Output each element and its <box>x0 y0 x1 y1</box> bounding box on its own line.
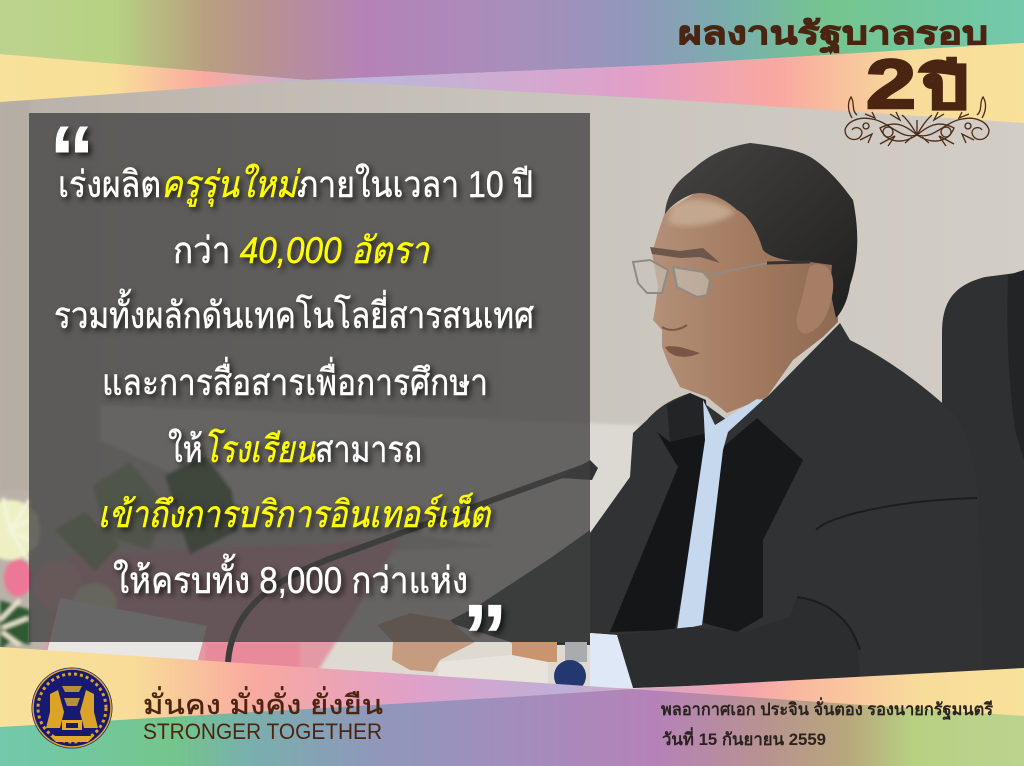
top colour band <box>0 0 1024 80</box>
cup <box>437 655 548 685</box>
government seal <box>32 668 112 748</box>
photo: man <box>633 143 857 413</box>
ear <box>797 264 833 334</box>
quote text <box>49 108 534 688</box>
watch <box>565 642 587 662</box>
photo: chair <box>942 272 1024 680</box>
flowers <box>0 498 117 650</box>
credit date: วันที่ 15 กันยายน 2559 <box>662 727 826 749</box>
slogan Thai: มั่นคง มั่งคั่ง ยั่งยืน <box>143 686 383 720</box>
shirt <box>677 399 763 630</box>
mouth <box>665 346 700 357</box>
title: 2 years: ปี <box>918 56 968 121</box>
photo: name plate <box>40 598 207 682</box>
line 2: กว่า 40,000 อัตรา <box>173 230 430 271</box>
photo: microphone <box>228 465 590 662</box>
line 4: และการสื่อสารเพื่อการศึกษา <box>102 356 488 403</box>
line 3: รวมทั้งผลักดันเทคโนโลยี่สารสนเทศ <box>54 288 534 336</box>
jacket: zip panel left <box>610 432 708 632</box>
line 6: เข้าถึงการบริการอินเทอร์เน็ต <box>98 492 492 535</box>
top ribbon <box>0 43 1024 123</box>
quote panel <box>29 108 590 688</box>
neck and face <box>652 190 838 413</box>
left sleeve behind panel <box>447 530 590 645</box>
jacket: collar left <box>667 393 708 467</box>
table tan patch <box>512 642 557 662</box>
title: 2 years <box>866 45 968 123</box>
jacket: creases <box>797 498 977 650</box>
cuff <box>590 633 633 688</box>
eyebrow <box>650 247 720 263</box>
hair <box>665 143 857 318</box>
ornament <box>845 97 989 146</box>
line 5: ให้โรงเรียนสามารถ <box>168 428 422 470</box>
hand <box>377 613 475 672</box>
opening quote: “ <box>49 108 95 210</box>
jacket: lower arm <box>617 597 860 688</box>
bottom ribbon <box>0 647 1024 766</box>
photo: table and wall shapes <box>0 100 640 700</box>
closing quote: ” <box>462 586 508 688</box>
slogan English: STRONGER TOGETHER <box>143 719 382 744</box>
credit name: พลอากาศเอก ประจิน จั่นตอง รองนายกรัฐมนตรี <box>661 697 994 721</box>
glasses <box>633 260 810 297</box>
jacket: zip panel right <box>703 418 803 632</box>
bottom colour band <box>0 689 1024 766</box>
line 1: เร่งผลิตครูรุ่นใหม่ภายในเวลา 10 ปี <box>58 163 533 207</box>
title: 2 years: 2 <box>866 45 916 123</box>
line 7: ให้ครบทั้ง 8,000 กว่าแห่ง <box>113 553 468 601</box>
title: ผลงานรัฐบาลรอบ <box>678 15 988 54</box>
jacket <box>560 323 983 688</box>
nose shadow <box>662 325 687 330</box>
